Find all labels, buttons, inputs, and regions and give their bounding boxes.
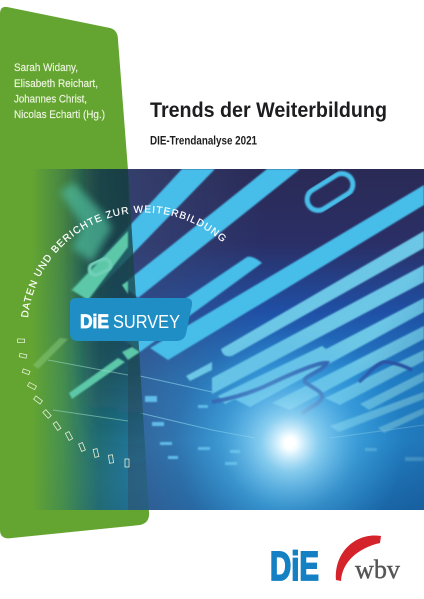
DIE survey badge: DiE <box>80 312 109 333</box>
authors: Nicolas Echarti (Hg.) <box>14 109 105 121</box>
arc of small rectangles <box>17 339 129 467</box>
authors <box>14 62 105 121</box>
authors: Sarah Widany, <box>14 62 78 74</box>
series name on arc: DATEN UND BERICHTE ZUR WEITERBILDUNG <box>21 205 226 318</box>
authors: Elisabeth Reichart, <box>14 78 98 90</box>
subtitle: DIE-Trendanalyse 2021 <box>150 134 257 148</box>
DIE survey badge: SURVEY <box>113 311 180 332</box>
cover photo: glowing data bars <box>32 169 424 510</box>
DIE survey badge <box>70 298 192 341</box>
thin horizon lines <box>140 376 424 438</box>
DIE logo: DiE <box>270 543 319 589</box>
teal bars inside the green zone <box>33 231 140 399</box>
wbv logo <box>336 535 400 584</box>
oval link shape <box>303 169 357 215</box>
green translucent overlay on photo <box>32 169 149 510</box>
dark squiggle line <box>212 363 327 414</box>
authors: Johannes Christ, <box>14 94 87 106</box>
green panel <box>0 7 149 538</box>
wbv logo: wbv <box>355 555 400 584</box>
title: Trends der Weiterbildung <box>150 98 387 122</box>
